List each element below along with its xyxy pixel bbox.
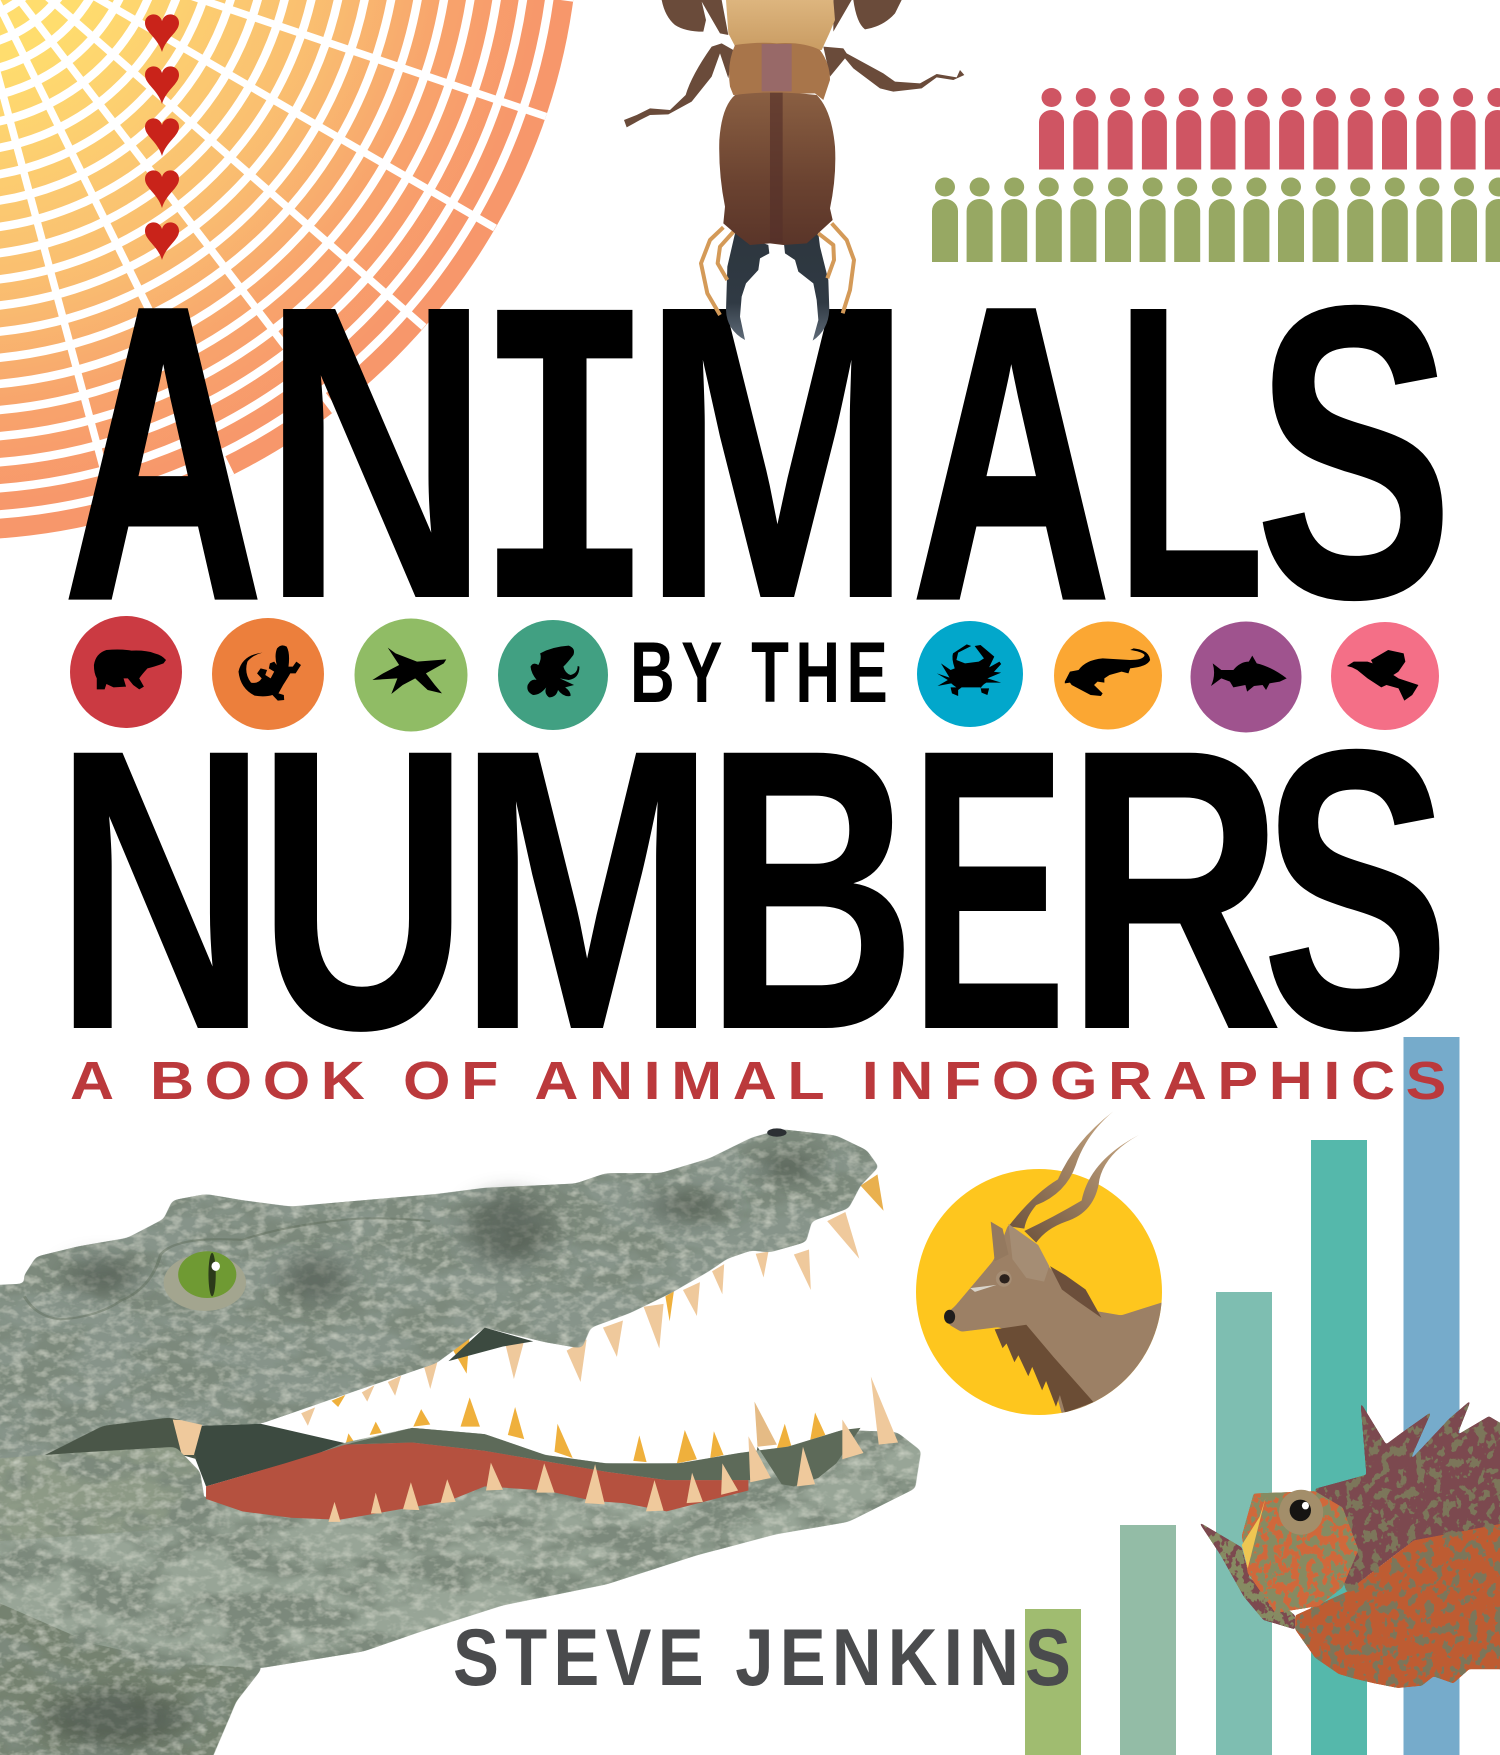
kudu ears: [991, 1222, 1009, 1261]
subtitle: A BOOK OF ANIMAL INFOGRAPHICS: [70, 1051, 1446, 1111]
icon: crab: [917, 621, 1023, 727]
beetle pincers: [726, 233, 829, 341]
title: ANIMALS: S: [1254, 219, 1454, 687]
crocodile neck: [0, 1559, 261, 1755]
title: ANIMALS: A: [64, 221, 262, 686]
crocodile dark inner cheek: [18, 1415, 197, 1468]
icon: octopus: [498, 620, 608, 730]
crocodile gum: [345, 1428, 861, 1486]
crocodile back of mouth: [194, 1424, 351, 1486]
title: NUMBERS: S: [1261, 666, 1450, 1113]
title: ANIMALS: L: [1114, 219, 1265, 686]
beetle abdomen: [719, 92, 835, 245]
title: NUMBERS: E: [910, 666, 1067, 1113]
kudu horns: [1009, 1111, 1139, 1243]
row of animal icon circles: [70, 616, 1439, 732]
title: NUMBERS: [54, 665, 1450, 1114]
red row of people pictogram: [1039, 88, 1500, 170]
scorpionfish illustration: [1198, 1400, 1500, 1688]
crocodile dark patches on upper jaw: [67, 1152, 818, 1305]
yellow circle with kudu illustration: [916, 1112, 1162, 1415]
title: NUMBERS: M: [457, 667, 717, 1114]
fish yellow stripe: [1242, 1498, 1266, 1568]
beetle illustration: [624, 0, 964, 341]
icon: starfish: [354, 618, 468, 732]
title: BY THE: BY THE: [630, 624, 888, 720]
kudu body and head clipped to circle: [948, 1226, 1162, 1413]
crocodile nostril: [767, 1128, 787, 1137]
crocodile lower teeth in front: [328, 1377, 898, 1522]
green row of people pictogram: [932, 178, 1500, 262]
title: NUMBERS: B: [704, 667, 917, 1113]
sunburst radial chart: [0, 0, 579, 540]
icon: bird: [1331, 622, 1439, 730]
crocodile lower teeth behind jaw: [345, 1397, 825, 1463]
title: NUMBERS: R: [1065, 667, 1284, 1114]
fish head: [1242, 1491, 1358, 1613]
crocodile brow line: [24, 1218, 430, 1319]
beetle legs: [624, 0, 964, 127]
crocodile eye: [164, 1251, 246, 1311]
crocodile upper jaw: [0, 1129, 879, 1468]
kudu face stripe and nose: [970, 1285, 997, 1292]
yellow circle: [916, 1169, 1162, 1415]
beetle head: [726, 0, 835, 50]
title: ANIMALS: [64, 218, 1454, 728]
author: STEVE JENKINS: [453, 1612, 1071, 1702]
crocodile cheek: [0, 1447, 206, 1543]
title: NUMBERS: U: [257, 667, 469, 1113]
fish chin: [1198, 1522, 1295, 1629]
icon: fish: [1190, 622, 1302, 732]
crocodile illustration: [0, 1128, 921, 1755]
title: ANIMALS: A: [912, 221, 1110, 686]
title: ANIMALS: N: [262, 218, 490, 686]
icon: crocodile: [1054, 622, 1162, 730]
icon: bear: [70, 616, 182, 728]
fish back: [1315, 1400, 1500, 1592]
kudu eye: [996, 1271, 1012, 1287]
crocodile dark mouth wedge: [448, 1328, 533, 1361]
crocodile upper teeth: [173, 1174, 884, 1455]
bar chart: five rising bars: [1025, 1037, 1460, 1755]
title: ANIMALS: M: [641, 218, 914, 686]
beetle thorax: [729, 43, 830, 100]
title: NUMBERS: N: [54, 665, 268, 1113]
icon: gecko: [212, 618, 324, 730]
title: ANIMALS: I: [474, 234, 655, 728]
fish belly: [1295, 1522, 1500, 1688]
crocodile tongue: [206, 1443, 748, 1520]
beetle antennae: [701, 223, 854, 315]
fish eye: [1279, 1490, 1323, 1535]
crocodile neck dark patch: [42, 1689, 188, 1747]
column of five hearts: [145, 14, 179, 260]
crocodile lower jaw: [0, 1428, 921, 1668]
